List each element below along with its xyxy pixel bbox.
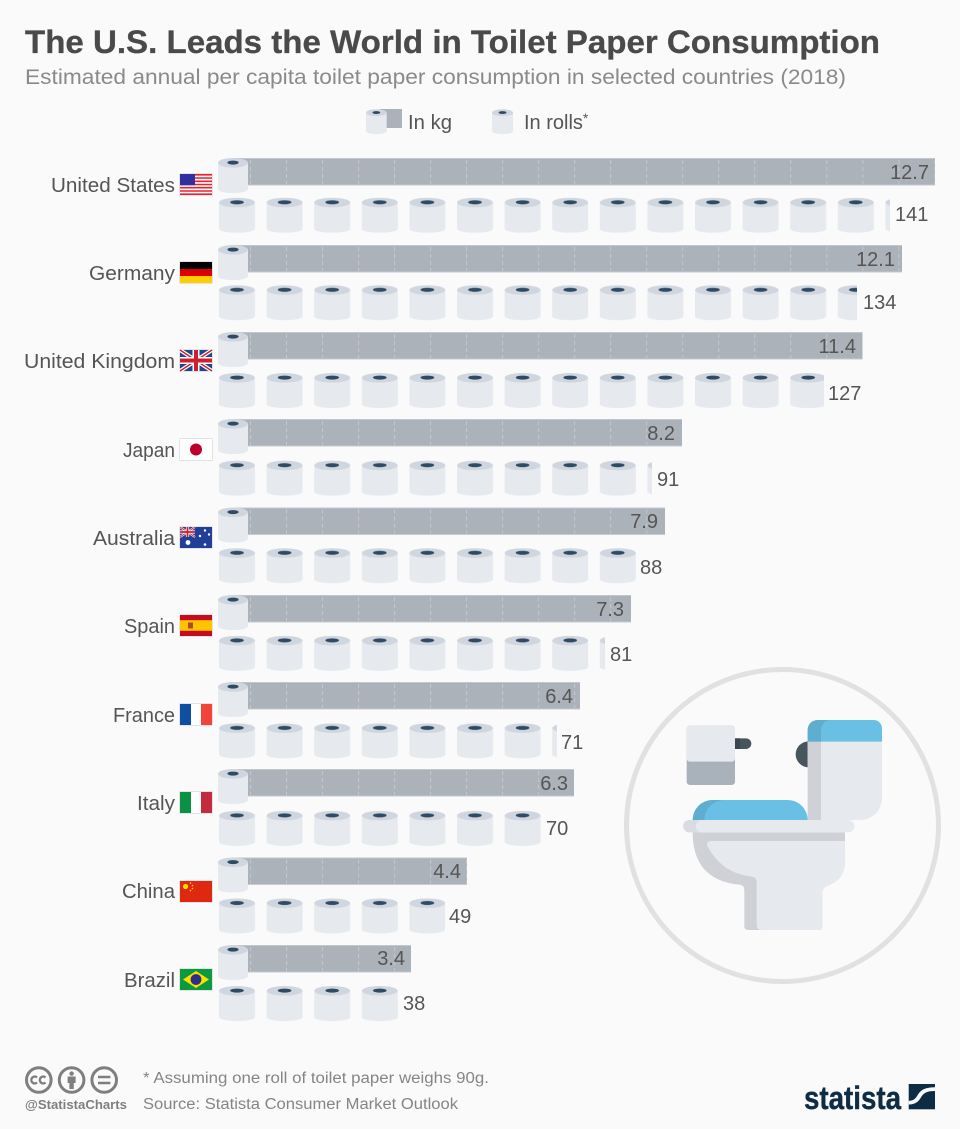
- row: China: [122, 858, 471, 934]
- bar: 6.3 kg: [218, 769, 574, 804]
- row: France: [113, 682, 583, 759]
- handle: @StatistaCharts: @StatistaCharts: [25, 1098, 127, 1112]
- flag: United Kingdom: [180, 350, 212, 372]
- value: rolls: 81: [610, 644, 632, 666]
- value: kg: 11.4: [819, 336, 856, 358]
- icon: cc: [26, 1068, 51, 1092]
- icon: rim: [683, 820, 854, 832]
- value: kg: 4.4: [433, 861, 461, 883]
- flag: China: [180, 880, 212, 902]
- row: Australia: [93, 508, 665, 584]
- source: Source: Statista Consumer Market Outlook: [143, 1096, 458, 1113]
- row: Brazil: [124, 945, 425, 1022]
- country label: China: [122, 881, 176, 903]
- circle outline: [626, 670, 938, 982]
- value: kg: 7.9: [630, 511, 658, 533]
- icon: flush handle: [796, 741, 809, 767]
- row: Japan: [123, 419, 682, 496]
- flag: Japan: [180, 438, 212, 460]
- logo wordmark: statista: [804, 1080, 901, 1116]
- flag: France: [180, 704, 212, 726]
- rolls row: 88: [219, 548, 636, 584]
- bar: 4.4 kg: [218, 858, 467, 892]
- icon: toilet: [683, 720, 882, 930]
- illustration: toilet in circle: [626, 670, 938, 982]
- value: kg: 12.7: [890, 162, 929, 184]
- icon: bowl: [693, 832, 845, 930]
- bar: 7.9 kg: [218, 508, 665, 542]
- country label: Japan: [123, 440, 175, 462]
- value: rolls: 91: [657, 469, 679, 491]
- rolls row: 81: [219, 636, 605, 671]
- country label: United Kingdom: [24, 351, 175, 373]
- value: rolls: 88: [640, 557, 662, 579]
- value: rolls: 134: [863, 292, 896, 314]
- legend label: in rolls: *: [583, 110, 589, 126]
- bar: 3.4 kg: [218, 945, 411, 980]
- row: United Kingdom: [24, 332, 862, 408]
- flag: Germany: [180, 262, 212, 284]
- rolls row: 38: [219, 986, 398, 1022]
- rolls row: 127: [219, 373, 824, 408]
- value: kg: 7.3: [596, 599, 624, 621]
- bar: 12.1 kg: [218, 245, 902, 280]
- bar: 6.4 kg: [218, 682, 580, 717]
- logo mark: [909, 1084, 935, 1109]
- country label: Italy: [137, 793, 175, 815]
- flag: Brazil: [180, 968, 212, 990]
- value: kg: 6.4: [545, 686, 573, 708]
- value: kg: 8.2: [647, 423, 675, 445]
- country label: Spain: [124, 616, 175, 638]
- rolls row: 134: [219, 285, 857, 321]
- value: kg: 6.3: [540, 773, 568, 795]
- country label: United States: [51, 175, 175, 197]
- licence icons: [26, 1068, 116, 1092]
- legend label: in kg: In kg: [408, 112, 452, 134]
- rolls row: 141: [219, 198, 890, 233]
- value: rolls: 38: [403, 993, 425, 1015]
- subtitle: Estimated annual per capita toilet paper consumption in selected countries (2018): [25, 66, 846, 89]
- flag: Australia: [180, 526, 212, 548]
- icon: seat lid: [693, 800, 808, 820]
- legend: [366, 109, 589, 134]
- icon: tank: [808, 720, 882, 820]
- value: rolls: 70: [546, 818, 568, 840]
- bar: 12.7 kg: [218, 158, 935, 193]
- country label: France: [113, 705, 175, 727]
- value: rolls: 141: [895, 204, 928, 226]
- value: rolls: 49: [449, 906, 471, 928]
- footnote: * Assuming one roll of toilet paper weighs 90g.: [143, 1070, 489, 1087]
- flag: Spain: [180, 614, 212, 636]
- rolls row: 49: [219, 898, 445, 934]
- icon: attribution: [59, 1068, 84, 1092]
- rolls row: 91: [219, 461, 652, 496]
- value: kg: 12.1: [856, 249, 895, 271]
- rolls row: 70: [219, 811, 541, 846]
- row: Italy: [137, 769, 574, 846]
- flag: United States: [180, 174, 212, 196]
- country label: Germany: [89, 263, 175, 285]
- row: Germany: [89, 245, 902, 321]
- bar: 7.3 kg: [218, 595, 631, 630]
- icon: toilet paper roll: [687, 726, 751, 785]
- row: Spain: [124, 595, 632, 671]
- logo: statista: [804, 1080, 935, 1116]
- country label: Brazil: [124, 970, 175, 992]
- country label: Australia: [93, 528, 176, 550]
- legend icon: roll with sheet (kg): [366, 109, 402, 134]
- bar: 11.4 kg: [218, 332, 862, 367]
- legend label: in rolls: In rolls: [524, 112, 583, 134]
- row: United States: [51, 158, 935, 233]
- value: kg: 3.4: [377, 948, 405, 970]
- flag: Italy: [180, 792, 212, 814]
- value: rolls: 127: [828, 383, 861, 405]
- rolls row: 71: [219, 723, 557, 759]
- legend icon: roll: [492, 109, 513, 134]
- icon: no derivatives: [92, 1068, 116, 1092]
- bar: 8.2 kg: [218, 419, 682, 454]
- title: The U.S. Leads the World in Toilet Paper Consumption: [25, 24, 880, 60]
- value: rolls: 71: [561, 732, 583, 754]
